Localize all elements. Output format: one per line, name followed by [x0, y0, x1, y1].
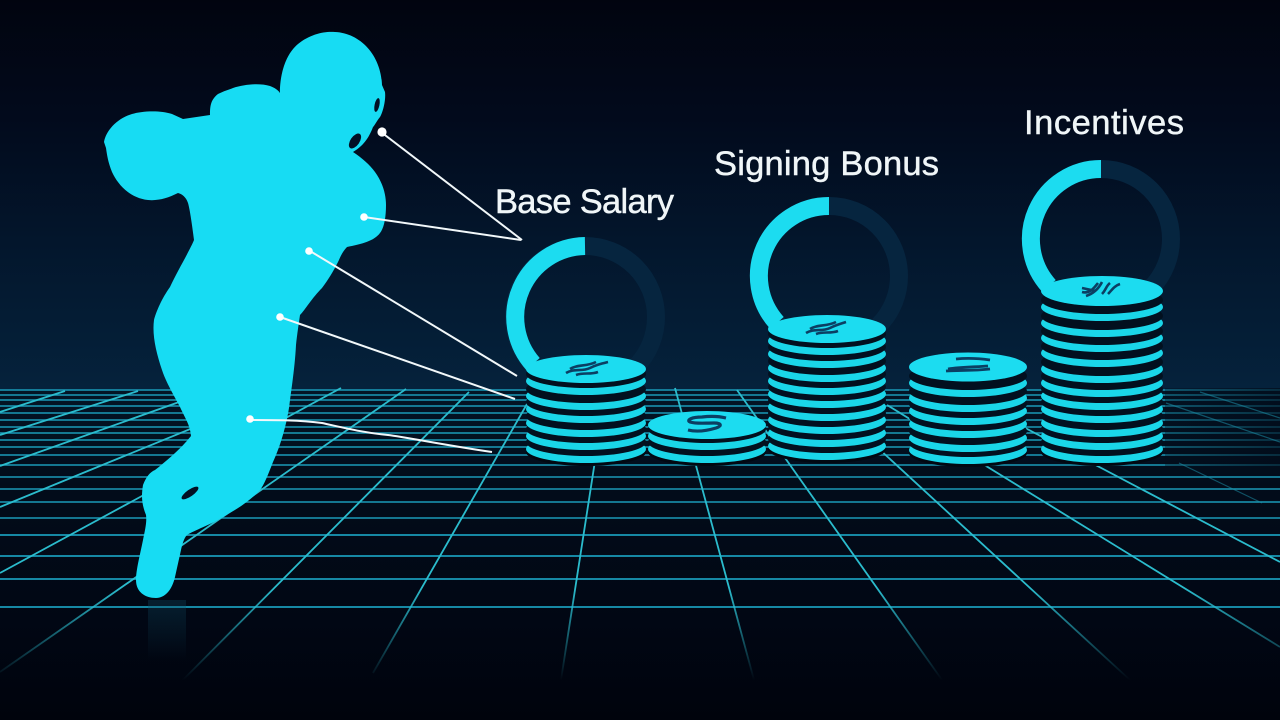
- ring: incentives: [1031, 169, 1171, 309]
- callout lines: [251, 132, 522, 452]
- perspective grid floor: [0, 388, 1280, 700]
- label: signing bonus: Signing Bonus: [714, 145, 939, 183]
- label: base salary: Base Salary: [495, 183, 675, 221]
- background sky: [0, 0, 1280, 390]
- ring: base salary: [514, 246, 656, 388]
- callout: leg to coin stack: [251, 420, 492, 452]
- callout: hip to coin stack: [280, 317, 515, 399]
- callout dots: [246, 127, 387, 423]
- coin stack: incentives: [1041, 276, 1163, 466]
- coin stack: fourth: [909, 352, 1027, 467]
- coin stack: base salary: [526, 355, 646, 466]
- callout: chest to base salary: [364, 217, 521, 240]
- coin symbol: base salary: [566, 362, 608, 375]
- coin stack: middle small: [648, 411, 766, 466]
- foot reflection: [148, 600, 186, 660]
- coin symbol: incentives: [1082, 282, 1120, 296]
- coin symbol: fourth: [946, 358, 990, 371]
- coin symbol: middle small: [688, 416, 726, 431]
- coin stack: signing bonus: [768, 315, 886, 463]
- ring: signing bonus: [759, 206, 899, 346]
- callout: helmet to base salary: [381, 132, 522, 240]
- label: incentives: Incentives: [1024, 104, 1184, 142]
- callout: waist to coin stack: [310, 251, 517, 376]
- coin symbol: signing bonus: [806, 322, 846, 334]
- background floor: [0, 390, 1280, 720]
- player silhouette: [104, 32, 386, 598]
